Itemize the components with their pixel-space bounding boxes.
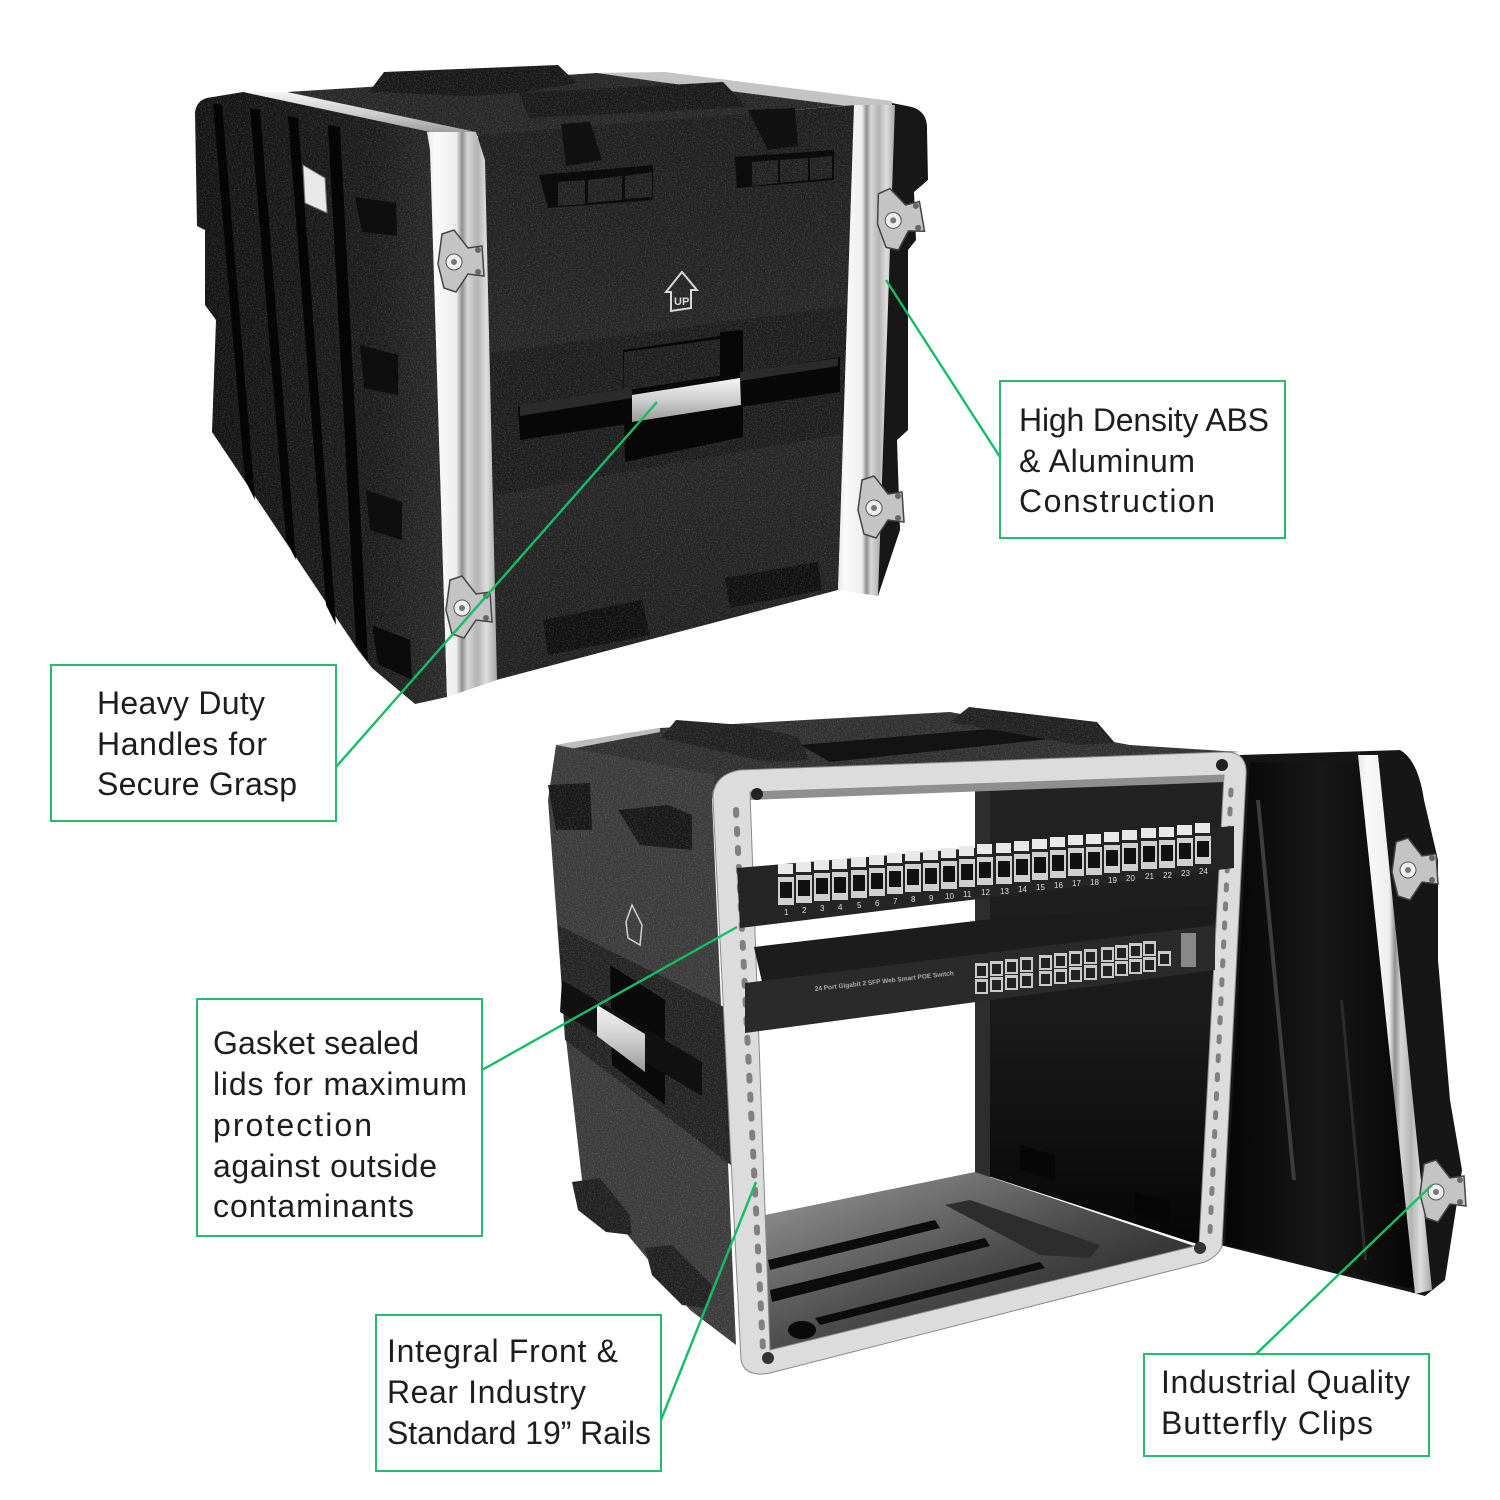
up arrow mark — [666, 272, 697, 311]
network switch — [745, 905, 1215, 1033]
callout: butterfly clips: Butterfly Clips — [1161, 1405, 1373, 1441]
patch panel port numbers: 8 — [911, 895, 916, 904]
handle mounting band — [476, 303, 868, 498]
callout: 19 inch rails: Rear Industry — [387, 1374, 586, 1410]
patch panel port numbers: 17 — [1072, 879, 1081, 888]
patch panel port numbers: 21 — [1145, 872, 1154, 881]
callout: gasket sealed lids: lids for maximum — [213, 1066, 467, 1102]
callout: 19 inch rails: Integral Front & — [387, 1333, 618, 1369]
upper feet — [548, 783, 592, 830]
upper feet — [539, 165, 653, 208]
callout: high density construction — [886, 280, 1285, 538]
interior back wall and rear rail — [975, 775, 1225, 1245]
callout: heavy duty handles — [51, 402, 657, 821]
patch panel jacks — [778, 823, 1211, 905]
callout: heavy duty handles: Handles for — [97, 726, 267, 762]
callout: high density construction: Construction — [1019, 483, 1215, 519]
callout: gasket sealed lids — [197, 927, 737, 1236]
callout: heavy duty handles: Heavy Duty — [97, 685, 265, 721]
handle band — [558, 925, 732, 1166]
lower feet — [543, 600, 650, 655]
patch panel port numbers: 23 — [1181, 869, 1190, 878]
switch ethernet ports — [975, 933, 1196, 994]
right side and strip — [838, 103, 928, 596]
callout: butterfly clips — [1144, 1185, 1432, 1456]
patch panel port numbers: 24 — [1199, 867, 1208, 876]
case left side with ribs — [195, 92, 447, 704]
patch panel port numbers: 5 — [857, 901, 862, 910]
patch panel port numbers: 22 — [1163, 871, 1172, 880]
callout: gasket sealed lids: protection — [213, 1107, 372, 1143]
patch panel port numbers: 11 — [963, 890, 972, 899]
patch panel port numbers: 20 — [1126, 874, 1135, 883]
patch panel port numbers: 14 — [1018, 885, 1027, 894]
callout: butterfly clips: Industrial Quality — [1161, 1364, 1410, 1400]
case front panel — [476, 105, 868, 680]
patch panel port numbers: 19 — [1108, 876, 1117, 885]
side label plate — [303, 165, 327, 213]
product photo: open rack case — [548, 707, 1466, 1374]
callout: high density construction: High Density ABS — [1019, 402, 1269, 438]
open door — [1220, 750, 1466, 1296]
callout: gasket sealed lids: against outside — [213, 1148, 437, 1184]
upper straps — [561, 122, 602, 166]
callout: high density construction: & Aluminum — [1019, 443, 1195, 479]
lower feet — [572, 1178, 632, 1235]
patch panel port numbers: 6 — [875, 899, 880, 908]
callout: heavy duty handles: Secure Grasp — [97, 766, 297, 802]
carry handle — [560, 980, 702, 1096]
carry handle — [518, 357, 840, 440]
patch panel port numbers: 18 — [1090, 878, 1099, 887]
patch panel port numbers: 16 — [1054, 881, 1063, 890]
product photo: closed rack case — [195, 65, 928, 704]
aluminum front frame with holes — [713, 752, 1246, 1374]
patch panel port numbers: 13 — [1000, 887, 1009, 896]
patch panel port numbers: 9 — [929, 894, 934, 903]
up arrow — [626, 905, 642, 945]
patch panel port numbers: 15 — [1036, 883, 1045, 892]
case top surface — [243, 65, 892, 136]
interior floor tray — [765, 1172, 1200, 1352]
up arrow mark: UP — [674, 296, 689, 308]
patch panel port numbers: 2 — [802, 906, 807, 915]
case top — [556, 707, 1240, 800]
callout: gasket sealed lids: Gasket sealed — [213, 1025, 419, 1061]
patch panel port numbers: 10 — [945, 892, 954, 901]
butterfly clips on closed case — [438, 185, 926, 638]
left aluminum strip — [427, 132, 497, 697]
patch panel port numbers: 12 — [981, 888, 990, 897]
24 port patch panel — [737, 823, 1234, 928]
network switch: 24 Port Gigabit 2 SFP Web Smart POE Switch — [814, 970, 954, 993]
patch panel port numbers: 4 — [838, 903, 843, 912]
patch panel port numbers: 3 — [820, 904, 825, 913]
case left side — [548, 745, 736, 1345]
patch panel port numbers — [784, 867, 1208, 917]
patch panel port numbers: 1 — [784, 908, 789, 917]
callout: gasket sealed lids: contaminants — [213, 1188, 414, 1224]
callout: 19 inch rails: Standard 19” Rails — [387, 1415, 651, 1451]
callout: 19 inch rails — [376, 1182, 756, 1471]
patch panel port numbers: 7 — [893, 897, 898, 906]
